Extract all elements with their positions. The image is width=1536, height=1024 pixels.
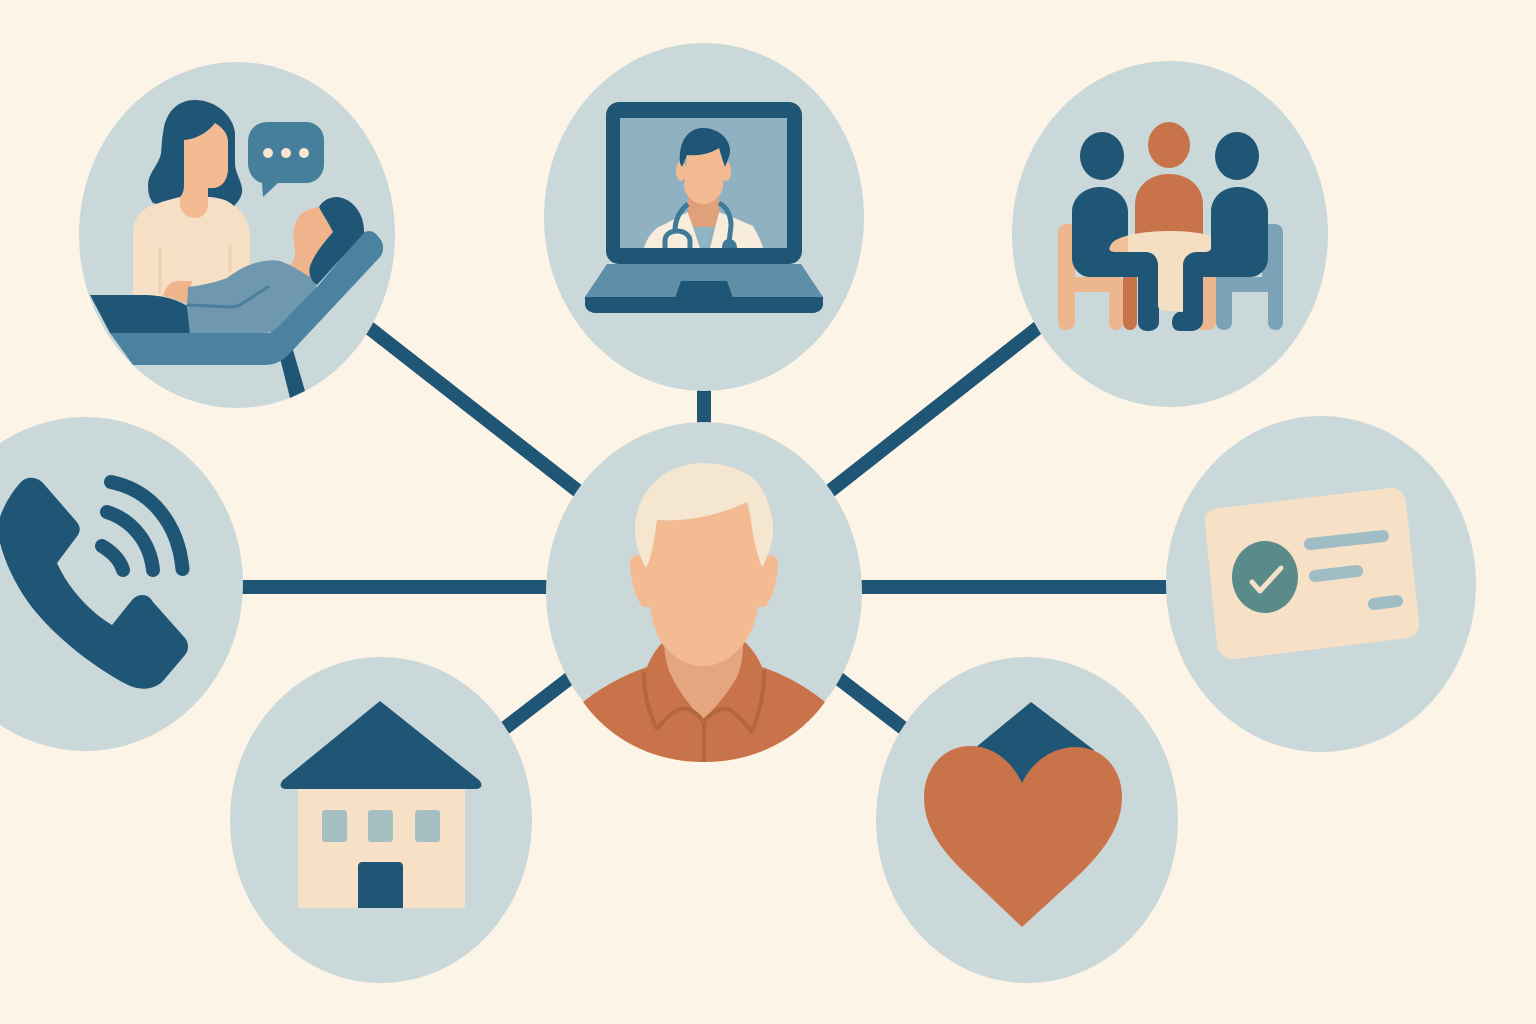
- house icon: [281, 701, 481, 908]
- text lines: [1310, 536, 1383, 544]
- node: family meeting around table: [1012, 61, 1328, 407]
- phone handset icon: [0, 478, 188, 689]
- node: telehealth laptop: [544, 43, 864, 391]
- left knee overlap: [1109, 236, 1128, 252]
- left person: [1072, 132, 1159, 331]
- node: phone support: [0, 417, 243, 751]
- head: [630, 502, 778, 666]
- shirt: [583, 640, 825, 762]
- table: [1109, 231, 1211, 311]
- signal waves icon: [102, 482, 182, 570]
- node: home care house: [230, 657, 532, 983]
- node: in-person bedside care: [79, 62, 395, 408]
- roof icon: [975, 702, 1094, 800]
- bed and patient: [90, 197, 383, 398]
- card: [1205, 488, 1419, 659]
- connector lines: [240, 326, 1168, 728]
- laptop: [585, 102, 823, 313]
- node: central older patient: [546, 422, 862, 762]
- right person: [1172, 132, 1268, 331]
- white hair: [635, 463, 773, 568]
- node: insurance card: [1166, 416, 1476, 752]
- check badge: [1232, 541, 1298, 613]
- node: heart and home: [876, 657, 1178, 983]
- rear person: [1135, 122, 1203, 238]
- speech bubble: [248, 122, 324, 197]
- chairs: [1058, 224, 1283, 330]
- doctor on screen: [644, 128, 763, 248]
- heart icon: [924, 746, 1122, 927]
- caregiver: [133, 100, 250, 296]
